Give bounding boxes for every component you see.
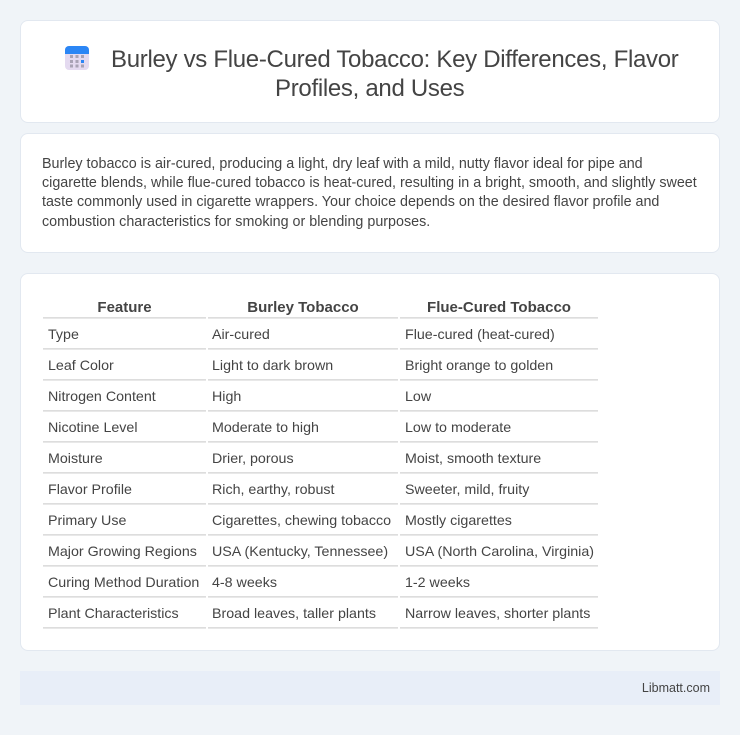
comparison table [43,299,598,629]
icon: calendar [65,46,89,70]
comparison table: Flavor Profile [48,482,132,498]
comparison table: Broad leaves, taller plants [212,606,376,622]
intro paragraph: cigarette blends, while flue-cured tobacco is heat-cured, resulting in a bright, smooth, and slightly sweet [42,175,697,191]
comparison table: Rich, earthy, robust [212,482,334,498]
intro paragraph [42,156,697,230]
comparison table: 1-2 weeks [405,575,470,591]
comparison table: Low to moderate [405,420,511,436]
title: Profiles, and Uses [275,75,464,102]
comparison table: USA (Kentucky, Tennessee) [212,544,388,560]
footer bar [20,671,720,705]
intro paragraph: taste commonly used in cigarette wrappers. Your choice depends on the desired flavor profile and [42,194,659,210]
comparison table: USA (North Carolina, Virginia) [405,544,594,560]
comparison table: Low [405,389,431,405]
comparison table: Light to dark brown [212,358,333,374]
intro paragraph: combustion characteristics for smoking or blending purposes. [42,214,430,230]
comparison table: Primary Use [48,513,126,529]
comparison table: Flue-Cured Tobacco [427,299,571,316]
comparison table: Feature [97,299,152,316]
comparison table: Curing Method Duration [48,575,199,591]
comparison table: Air-cured [212,327,270,343]
comparison table: Cigarettes, chewing tobacco [212,513,391,529]
comparison table: Narrow leaves, shorter plants [405,606,590,622]
comparison table: Leaf Color [48,358,114,374]
comparison table: Flue-cured (heat-cured) [405,327,555,343]
comparison table: Drier, porous [212,451,294,467]
comparison table: Major Growing Regions [48,544,197,560]
title [111,46,678,102]
comparison table: Type [48,327,79,343]
comparison table: Mostly cigarettes [405,513,512,529]
comparison table: Moisture [48,451,103,467]
panel: title card [20,20,720,123]
panel: comparison table [20,273,720,651]
intro paragraph: Burley tobacco is air-cured, producing a light, dry leaf with a mild, nutty flavor ideal for pipe and [42,156,643,172]
comparison table: Plant Characteristics [48,606,179,622]
comparison table: Nicotine Level [48,420,138,436]
comparison table: Bright orange to golden [405,358,553,374]
comparison table: Nitrogen Content [48,389,156,405]
comparison table: Burley Tobacco [247,299,359,316]
panel: intro text [20,133,720,253]
comparison table: Sweeter, mild, fruity [405,482,529,498]
title: Burley vs Flue-Cured Tobacco: Key Differences, Flavor [111,46,678,73]
comparison table: Moist, smooth texture [405,451,541,467]
comparison table: Moderate to high [212,420,319,436]
footer credit: Libmatt.com [642,681,710,695]
comparison table: 4-8 weeks [212,575,277,591]
comparison table: High [212,389,241,405]
